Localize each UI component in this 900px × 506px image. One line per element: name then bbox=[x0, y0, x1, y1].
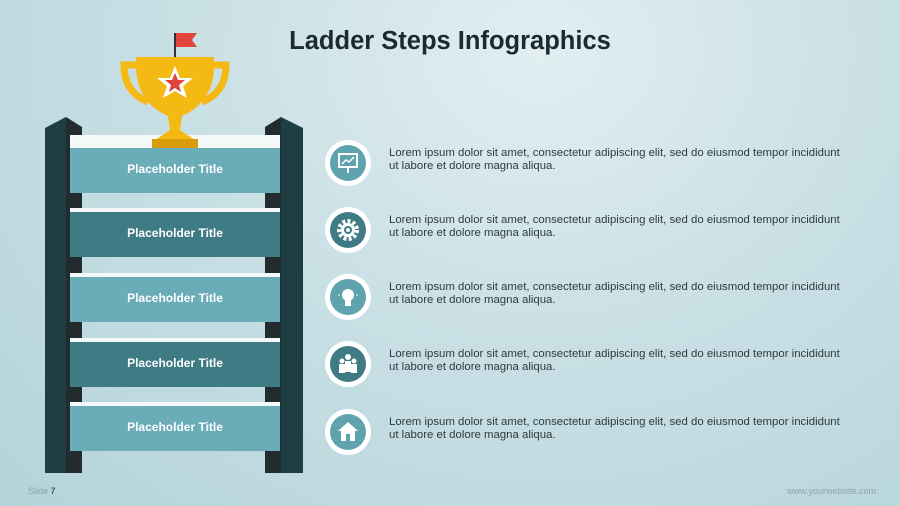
step 5 bbox=[70, 402, 280, 451]
ladder bbox=[45, 117, 303, 473]
icon: house bbox=[325, 409, 371, 455]
footer website: www.yourwebsite.com bbox=[787, 486, 876, 496]
icon: bulb bbox=[325, 274, 371, 320]
step 3 bbox=[70, 273, 280, 322]
text 4 bbox=[389, 348, 840, 373]
icon: people bbox=[325, 341, 371, 387]
text 2: Lorem ipsum dolor sit amet, consectetur adipiscing elit, sed do eiusmod tempor incididunt bbox=[389, 214, 840, 226]
text 5: Lorem ipsum dolor sit amet, consectetur adipiscing elit, sed do eiusmod tempor incididunt bbox=[389, 416, 840, 428]
text 5: ut labore et dolore magna aliqua. bbox=[389, 429, 556, 441]
icon: gear bbox=[325, 207, 371, 253]
text 5 bbox=[389, 416, 840, 441]
text 1 bbox=[389, 147, 840, 172]
text 3: ut labore et dolore magna aliqua. bbox=[389, 294, 556, 306]
text 4: ut labore et dolore magna aliqua. bbox=[389, 361, 556, 373]
step 4: Placeholder Title bbox=[127, 356, 223, 370]
text 1: ut labore et dolore magna aliqua. bbox=[389, 160, 556, 172]
footer slide number: Slide 7 bbox=[28, 486, 56, 496]
text 3 bbox=[389, 281, 840, 306]
step 2: Placeholder Title bbox=[127, 226, 223, 240]
step 5: Placeholder Title bbox=[127, 420, 223, 434]
text 2 bbox=[389, 214, 840, 239]
rails bbox=[45, 117, 303, 473]
text 1: Lorem ipsum dolor sit amet, consectetur adipiscing elit, sed do eiusmod tempor incididunt bbox=[389, 147, 840, 159]
step 2 bbox=[70, 208, 280, 257]
text 2: ut labore et dolore magna aliqua. bbox=[389, 227, 556, 239]
step 1: Placeholder Title bbox=[127, 162, 223, 176]
icon: presentation bbox=[325, 140, 371, 186]
top platform bbox=[70, 135, 280, 149]
trophy bbox=[120, 33, 230, 148]
step 4 bbox=[70, 338, 280, 387]
step 1 bbox=[70, 144, 280, 193]
text 4: Lorem ipsum dolor sit amet, consectetur adipiscing elit, sed do eiusmod tempor incididunt bbox=[389, 348, 840, 360]
step 3: Placeholder Title bbox=[127, 291, 223, 305]
title: Ladder Steps Infographics bbox=[289, 27, 611, 55]
text 3: Lorem ipsum dolor sit amet, consectetur adipiscing elit, sed do eiusmod tempor incididunt bbox=[389, 281, 840, 293]
